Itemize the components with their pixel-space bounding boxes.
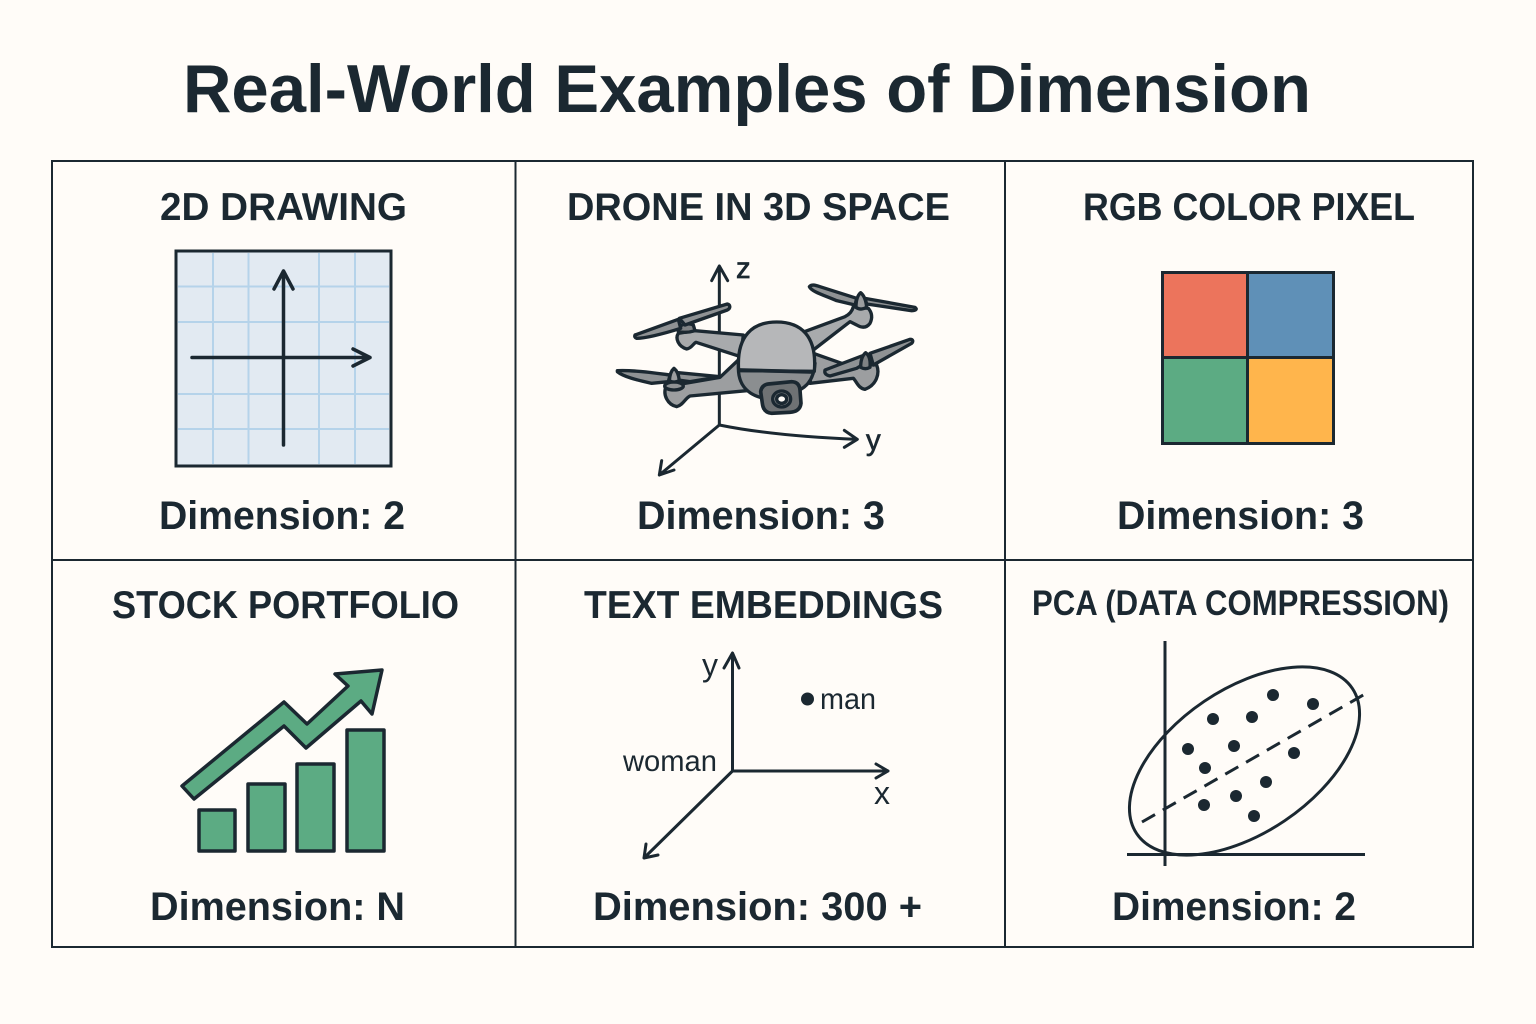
panel: 2D drawing [159, 186, 407, 538]
icon: PCA scatter with ellipse [1096, 629, 1393, 893]
value: drone: Dimension: 3 [637, 494, 885, 538]
value: RGB: Dimension: 3 [1117, 494, 1364, 538]
value: 2D drawing: Dimension: 2 [159, 494, 405, 538]
value: stock: Dimension: N [150, 885, 405, 929]
icon: drone with xyz axes [617, 252, 916, 475]
panel: text embeddings [584, 584, 943, 929]
panel: RGB color pixel [1083, 186, 1415, 538]
heading: RGB: RGB COLOR PIXEL [1083, 186, 1415, 229]
panel: drone in 3D space [567, 186, 950, 538]
icon: drone with xyz axes: z [736, 252, 751, 285]
value: PCA: Dimension: 2 [1112, 885, 1356, 929]
heading: drone: DRONE IN 3D SPACE [567, 186, 950, 229]
heading: stock: STOCK PORTFOLIO [112, 584, 459, 627]
heading: PCA: PCA (DATA COMPRESSION) [1032, 584, 1449, 623]
icon: bar chart with rising arrow [182, 670, 384, 851]
icon: drone with xyz axes: y [866, 424, 881, 457]
icon: four color squares [1162, 272, 1334, 444]
icon: embedding axes: man [820, 683, 876, 716]
heading: 2D drawing: 2D DRAWING [160, 186, 407, 229]
icon: embedding axes: x [874, 775, 890, 811]
icon: grid with axes [176, 251, 391, 466]
heading: embeddings: TEXT EMBEDDINGS [584, 584, 943, 627]
value: embeddings: Dimension: 300 + [593, 885, 922, 929]
panel: PCA [1032, 584, 1449, 929]
icon: embedding axes: y [702, 647, 718, 683]
icon: embedding axes: woman [622, 745, 717, 778]
title: Real-World Examples of Dimension [183, 51, 1311, 127]
icon: embedding axes [622, 647, 890, 858]
panel: stock portfolio [112, 584, 459, 929]
table grid [52, 161, 1473, 947]
